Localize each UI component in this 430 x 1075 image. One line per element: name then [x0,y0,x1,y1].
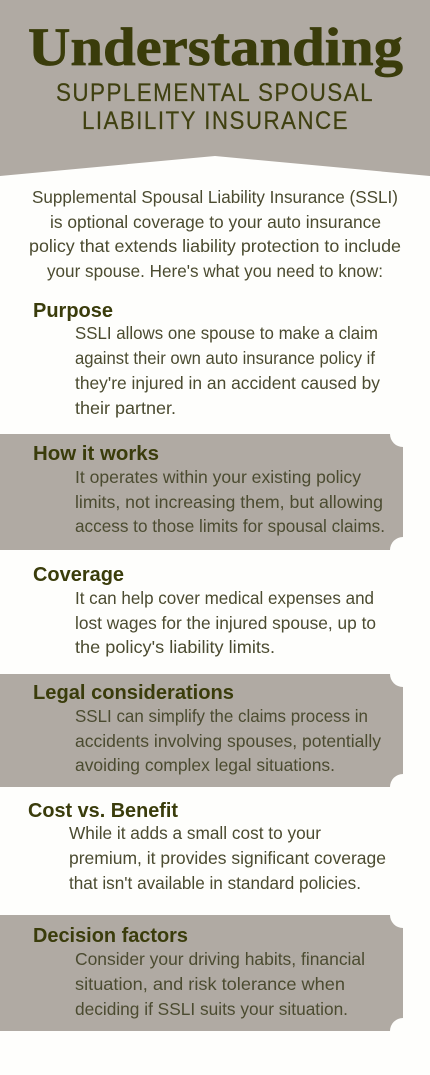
band: Decision factors [0,915,403,1031]
heading: Coverage: Coverage [33,564,124,586]
body: How it works: access to those limits for spousal claims. [75,516,385,536]
subtitle: LIABILITY INSURANCE [82,107,349,135]
section: Purpose [33,300,380,418]
body: Coverage: the policy's liability limits. [75,637,275,657]
intro text: policy that extends liability protection to include [29,236,401,256]
body: Cost vs. Benefit: premium, it provides significant coverage [69,848,386,868]
body: Legal considerations [75,706,381,775]
body: Coverage: lost wages for the injured spouse, up to [75,613,376,633]
body: Legal considerations: avoiding complex legal situations. [75,755,335,775]
body: Purpose: they're injured in an accident caused by [75,373,380,393]
body: Decision factors [75,949,365,1019]
band: Legal considerations [0,674,403,787]
body: Purpose: SSLI allows one spouse to make a claim [75,323,378,343]
heading: How it works: How it works [33,443,159,465]
intro text: is optional coverage to your auto insurance [50,212,381,232]
heading: Legal considerations: Legal considerations [33,682,234,704]
section: How it works [0,434,403,550]
body: How it works: limits, not increasing them, but allowing [75,492,383,512]
intro text [29,187,401,281]
heading: Cost vs. Benefit: Cost vs. Benefit [28,800,178,822]
body: Cost vs. Benefit [69,823,386,893]
header banner [0,0,430,176]
title: Understanding [28,17,403,77]
intro text: Supplemental Spousal Liability Insurance (SSLI) [32,187,398,207]
body: Coverage: It can help cover medical expenses and [75,588,374,608]
subtitle: SUPPLEMENTAL SPOUSAL [56,79,374,107]
section: Legal considerations [0,674,403,787]
section: Cost vs. Benefit [28,800,386,893]
heading: Purpose: Purpose [33,300,113,322]
intro text: your spouse. Here's what you need to know: [47,261,383,281]
subtitle [56,79,374,135]
body: Decision factors: Consider your driving habits, financial [75,949,365,969]
body: Purpose: against their own auto insurance policy if [75,348,375,368]
heading: Decision factors: Decision factors [33,925,188,947]
band: How it works [0,434,403,550]
section: Decision factors [0,915,403,1031]
body: Legal considerations: SSLI can simplify the claims process in [75,706,368,726]
body: Coverage [75,588,376,657]
body: Purpose: their partner. [75,398,176,418]
body: Decision factors: situation, and risk tolerance when [75,974,345,994]
body: Purpose [75,323,380,418]
body: Decision factors: deciding if SSLI suits your situation. [75,999,348,1019]
body: Cost vs. Benefit: While it adds a small cost to your [69,823,321,843]
body: Cost vs. Benefit: that isn't available in standard policies. [69,873,361,893]
body: How it works: It operates within your existing policy [75,467,361,487]
body: How it works [75,467,385,536]
section: Coverage [33,564,376,657]
body: Legal considerations: accidents involving spouses, potentially [75,731,381,751]
